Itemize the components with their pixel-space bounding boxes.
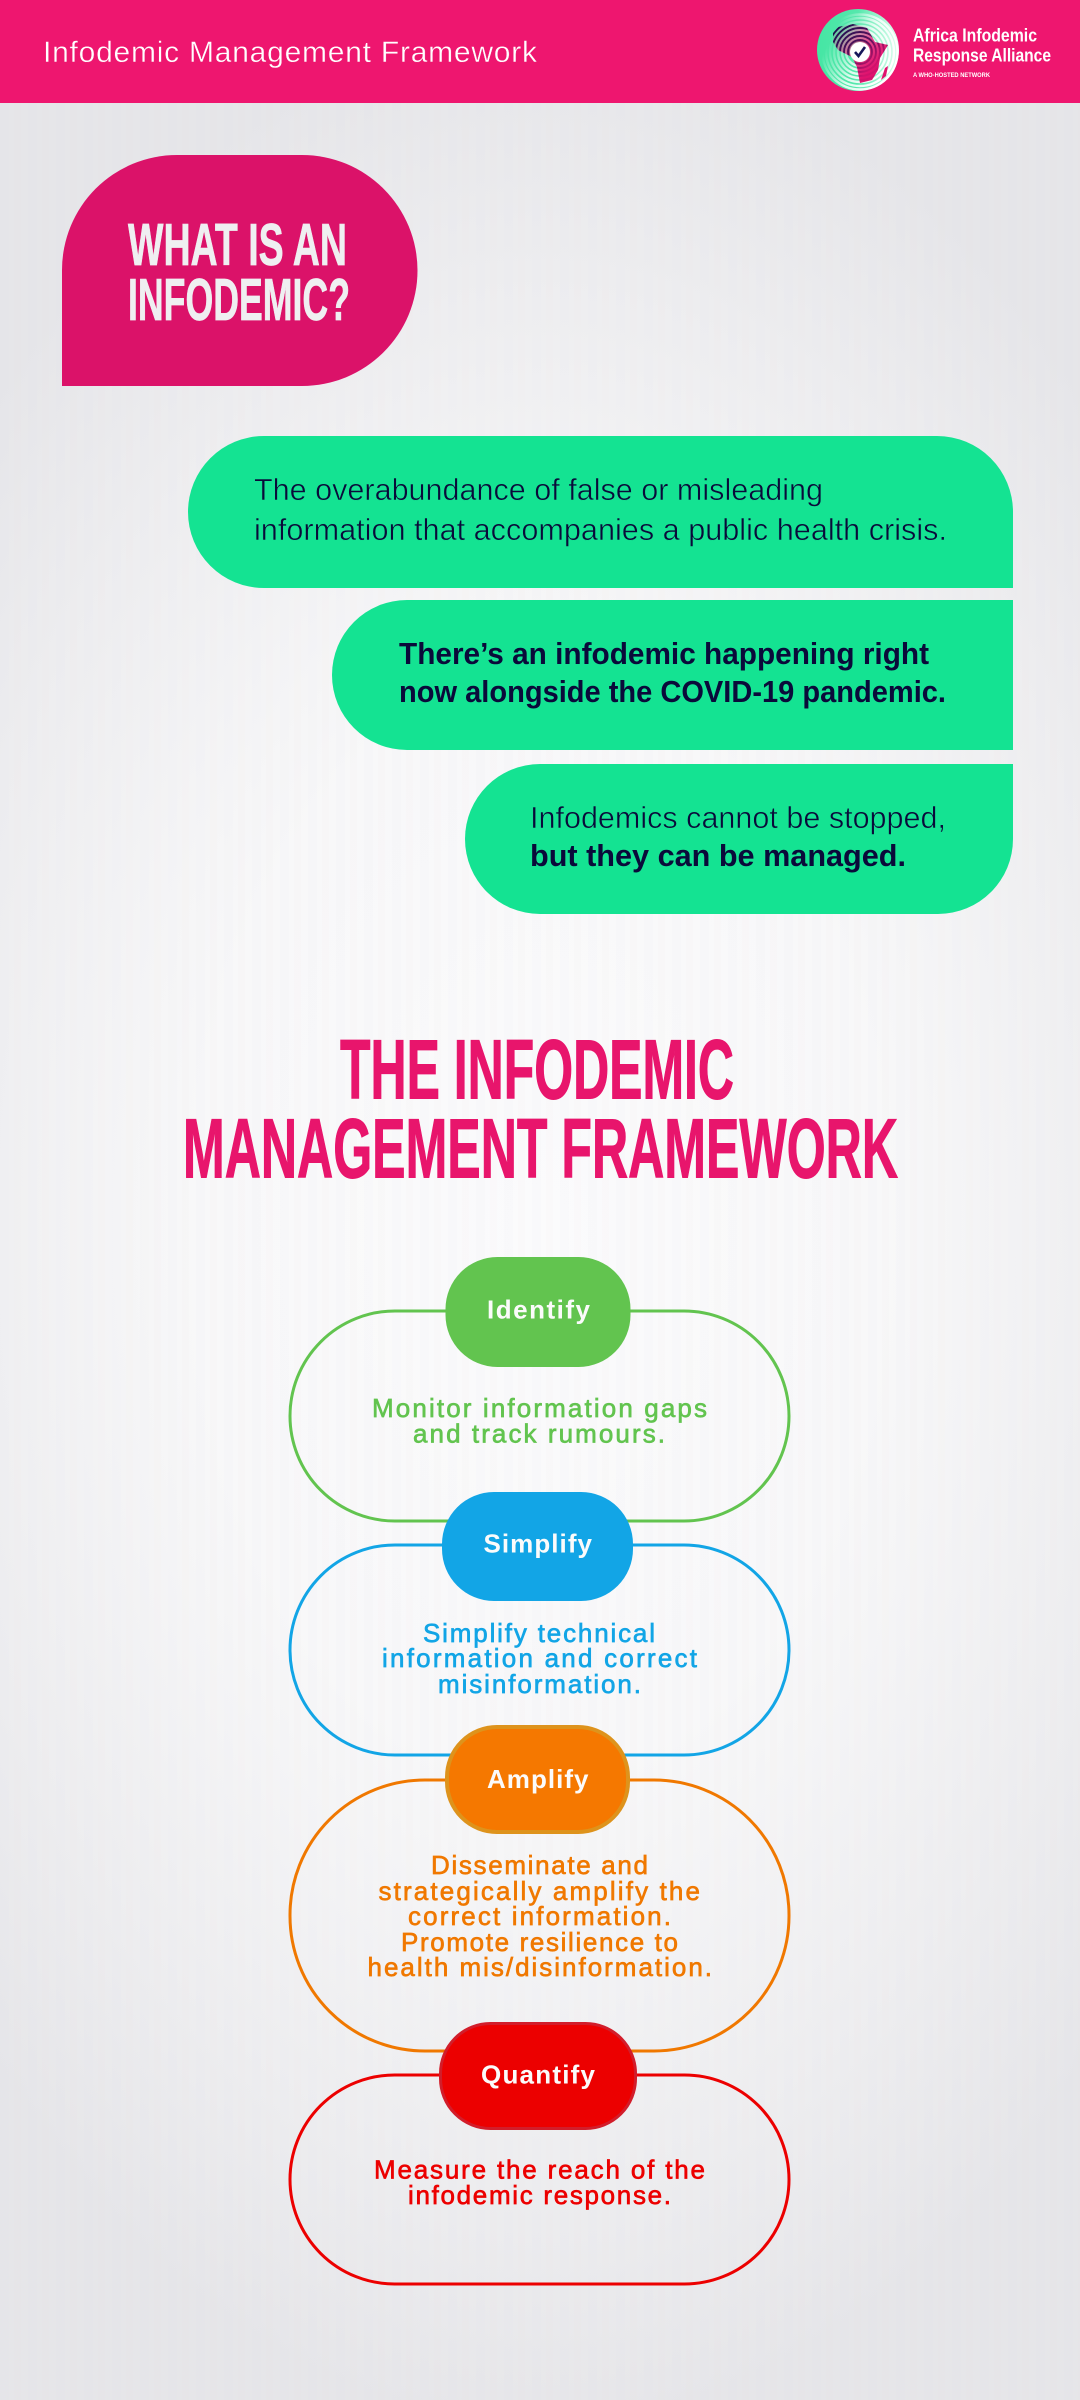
amplify pill: Amplify: [487, 1764, 589, 1794]
panel: definition bubble: [188, 436, 1013, 588]
logo wordmark: Africa Infodemic: [913, 26, 1037, 46]
can be managed text: [530, 800, 946, 873]
identify pill: [446, 1257, 630, 1367]
framework step: quantify: [290, 2024, 789, 2284]
icon: Africa Infodemic Response Alliance logo: [817, 9, 899, 91]
can be managed text: but they can be managed.: [530, 838, 906, 873]
simplify outline: [290, 1545, 789, 1755]
panel: what is an infodemic heading bubble: [62, 155, 418, 386]
heading: what is an infodemic: WHAT IS AN: [128, 212, 347, 278]
definition text: [254, 472, 947, 547]
amplify description: correct information.: [408, 1901, 671, 1931]
simplify description: information and correct: [382, 1643, 698, 1673]
logo wordmark: A WHO-HOSTED NETWORK: [913, 72, 990, 79]
header bar: [0, 0, 1080, 103]
panel: happening now bubble: [332, 600, 1013, 750]
quantify description: Measure the reach of the: [374, 2154, 705, 2184]
amplify description: Disseminate and: [431, 1850, 648, 1880]
amplify description: strategically amplify the: [378, 1876, 700, 1906]
framework step: simplify: [290, 1492, 789, 1755]
logo wordmark: Response Alliance: [913, 46, 1051, 66]
definition text: The overabundance of false or misleading: [254, 472, 823, 507]
quantify pill: Quantify: [481, 2060, 596, 2090]
happening now text: now alongside the COVID-19 pandemic.: [399, 674, 946, 709]
heading: the infodemic management framework: THE INFODEMIC: [340, 1022, 734, 1116]
happening now text: [399, 636, 946, 709]
amplify description: [368, 1850, 712, 1982]
identify description: Monitor information gaps: [372, 1393, 707, 1423]
simplify description: Simplify technical: [423, 1618, 655, 1648]
simplify description: misinformation.: [438, 1669, 641, 1699]
simplify pill: [442, 1492, 633, 1601]
framework step: amplify: [290, 1727, 789, 2051]
definition text: information that accompanies a public health crisis.: [254, 512, 947, 547]
quantify description: infodemic response.: [408, 2180, 671, 2210]
happening now text: There’s an infodemic happening right: [399, 636, 929, 671]
simplify description: [382, 1618, 698, 1699]
identify description: [372, 1393, 707, 1448]
quantify outline: [290, 2075, 789, 2284]
header title: Infodemic Management Framework: [43, 36, 538, 69]
logo wordmark: [913, 26, 1051, 79]
framework step: identify: [290, 1257, 789, 1521]
can be managed text: Infodemics cannot be stopped,: [530, 800, 946, 835]
heading: what is an infodemic: INFODEMIC?: [128, 267, 350, 333]
simplify pill: Simplify: [484, 1528, 593, 1558]
amplify description: Promote resilience to: [401, 1927, 678, 1957]
panel: can be managed bubble: [465, 764, 1013, 914]
quantify description: [374, 2154, 705, 2210]
heading: what is an infodemic: [128, 212, 350, 333]
amplify pill: [447, 1727, 628, 1832]
amplify outline: [290, 1780, 789, 2051]
quantify pill: [440, 2024, 636, 2128]
identify description: and track rumours.: [413, 1418, 665, 1448]
identify outline: [290, 1311, 789, 1521]
heading: the infodemic management framework: [183, 1022, 898, 1196]
amplify description: health mis/disinformation.: [368, 1952, 712, 1982]
identify pill: Identify: [487, 1294, 591, 1324]
